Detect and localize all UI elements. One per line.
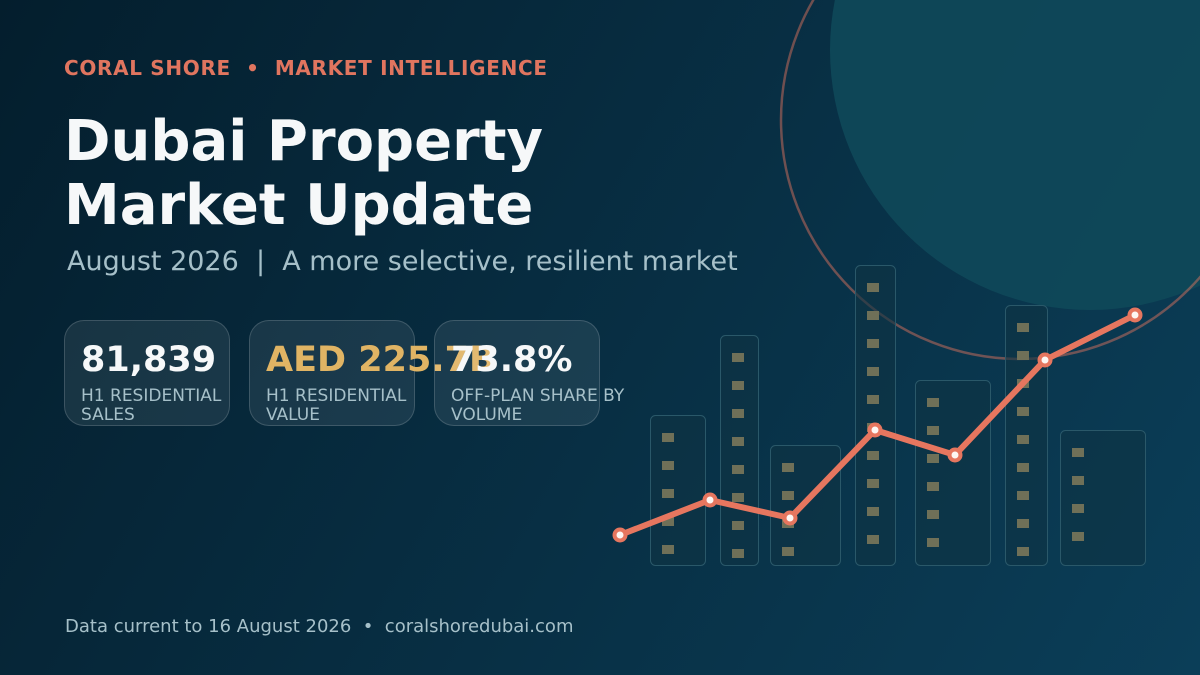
footer: Data current to 16 August 2026 • coralshoredubai.com	[65, 616, 573, 637]
stat card: value: AED 225.7B	[266, 340, 496, 380]
decorative teal circle	[830, 0, 1200, 310]
stat card: sales: SALES	[81, 405, 135, 425]
stat card: value	[249, 320, 496, 426]
stat card: value: H1 RESIDENTIAL	[266, 386, 406, 406]
stat card: sales	[64, 320, 230, 426]
decorative coral ring	[781, 0, 1200, 359]
skyline illustration	[650, 266, 1146, 566]
subtitle: August 2026 | A more selective, resilient market	[67, 246, 738, 277]
stat card: sales: 81,839	[81, 340, 216, 380]
rising trend line	[614, 310, 1140, 540]
stat card: off-plan share: VOLUME	[451, 405, 522, 425]
stat card: off-plan share: OFF-PLAN SHARE BY	[451, 386, 624, 406]
title: Dubai Property Market Update	[64, 109, 543, 238]
stat card: off-plan share: 73.8%	[451, 340, 572, 380]
stat card: value: VALUE	[266, 405, 320, 425]
stat card: sales: H1 RESIDENTIAL	[81, 386, 221, 406]
eyebrow label: CORAL SHORE • MARKET INTELLIGENCE	[64, 56, 548, 80]
stat card: off-plan share	[434, 320, 624, 426]
